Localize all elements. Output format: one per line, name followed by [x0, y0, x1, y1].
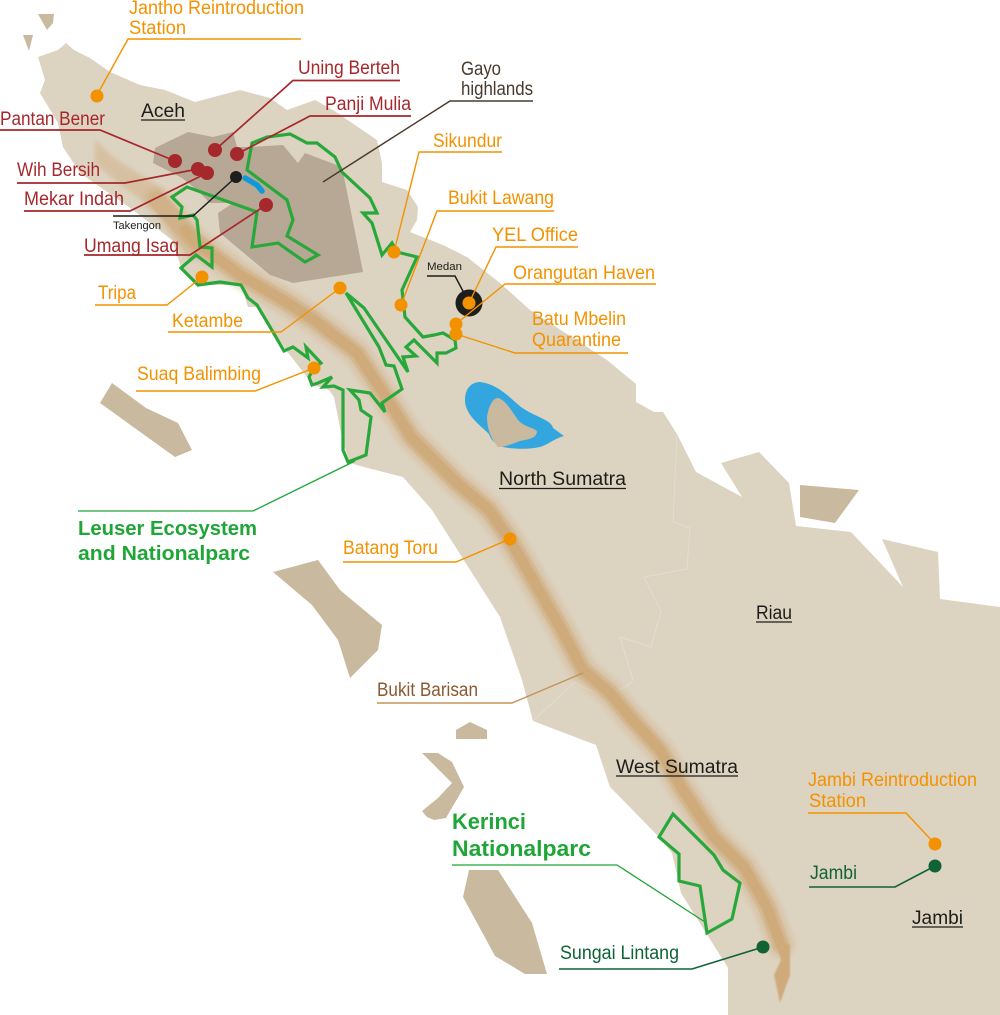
label: Batu Mbelin Quarantine: Quarantine — [532, 330, 621, 351]
region: Aceh: Aceh — [141, 101, 185, 122]
label: Jantho Reintroduction Station — [90, 0, 304, 102]
label: Kerinci Nationalparc: Nationalparc — [452, 836, 591, 861]
label: Batang Toru — [343, 532, 516, 562]
label: Umang Isaq — [84, 198, 273, 257]
region: North Sumatra: North Sumatra — [499, 469, 626, 490]
label: Batu Mbelin Quarantine — [450, 309, 628, 353]
label: Orangutan Haven — [450, 263, 656, 330]
label: Orangutan Haven: Orangutan Haven — [513, 263, 655, 284]
label: Bukit Lawang — [394, 188, 554, 312]
label: Tripa: Tripa — [98, 283, 136, 304]
label: Kerinci Nationalparc — [452, 809, 705, 922]
label: Medan — [427, 261, 482, 316]
label: Uning Berteh: Uning Berteh — [298, 58, 400, 79]
label: Ketambe: Ketambe — [172, 311, 243, 332]
Kerinci National Park boundary — [659, 814, 740, 933]
label: Bukit Barisan — [377, 673, 583, 703]
label: Gayo highlands — [323, 59, 533, 182]
label: Bukit Barisan: Bukit Barisan — [377, 680, 478, 701]
Gayo highlands area — [153, 132, 363, 283]
label: Takengon: Takengon — [113, 220, 161, 232]
label: Sungai Lintang — [559, 940, 770, 969]
label: Sikundur — [388, 131, 503, 258]
label: Leuser Ecosystem and Nationalparc — [78, 461, 355, 565]
label: Tripa — [95, 270, 208, 305]
label: Jambi Reintroduction Station — [808, 770, 977, 850]
label: Gayo highlands: Gayo — [461, 59, 501, 80]
region: Riau: Riau — [756, 603, 792, 624]
label: Bukit Lawang: Bukit Lawang — [448, 188, 554, 209]
label: Panji Mulia — [230, 94, 411, 161]
label: Suaq Balimbing — [136, 362, 320, 391]
label: Sungai Lintang: Sungai Lintang — [560, 943, 679, 964]
label: Leuser Ecosystem and Nationalparc: Leuser Ecosystem — [78, 518, 257, 540]
label: Jambi site: Jambi — [810, 863, 857, 884]
label: Suaq Balimbing: Suaq Balimbing — [137, 364, 261, 385]
label: Leuser Ecosystem and Nationalparc: and Nationalparc — [78, 543, 250, 565]
Bukit Barisan mountain chain — [95, 140, 790, 1003]
label: Jambi Reintroduction Station: Station — [809, 791, 866, 812]
label: Gayo highlands: highlands — [461, 79, 533, 100]
label: Takengon — [113, 171, 242, 232]
label: Mekar Indah — [24, 166, 214, 211]
label: Batu Mbelin Quarantine: Batu Mbelin — [532, 309, 626, 330]
label: Jambi Reintroduction Station: Jambi Reintroduction — [808, 770, 977, 791]
label: Jantho Reintroduction Station: Station — [129, 18, 186, 39]
label: Pantan Bener: Pantan Bener — [0, 109, 106, 130]
Lake Laut Tawar near Takengon — [245, 178, 262, 191]
label: Wih Bersih: Wih Bersih — [17, 160, 100, 181]
label: Uning Berteh — [208, 58, 400, 157]
region: West Sumatra: West Sumatra — [616, 757, 738, 778]
Lake Toba — [465, 382, 564, 449]
label: Wih Bersih — [17, 160, 205, 183]
islands — [23, 14, 859, 974]
label: Kerinci Nationalparc: Kerinci — [452, 809, 526, 834]
label: Panji Mulia: Panji Mulia — [325, 94, 411, 115]
Leuser Ecosystem boundary — [172, 134, 456, 462]
label: Medan: Medan — [427, 261, 462, 273]
label: Jambi site — [809, 860, 942, 887]
label: Mekar Indah: Mekar Indah — [24, 189, 124, 210]
label: Sikundur: Sikundur — [433, 131, 503, 152]
label: YEL Office — [462, 225, 578, 310]
label: Umang Isaq: Umang Isaq — [84, 236, 179, 257]
label: Pantan Bener — [0, 109, 182, 168]
label: Ketambe — [168, 282, 346, 332]
label: Batang Toru: Batang Toru — [343, 538, 438, 559]
region: Jambi: Jambi — [912, 908, 963, 929]
label: YEL Office: YEL Office — [492, 225, 578, 246]
